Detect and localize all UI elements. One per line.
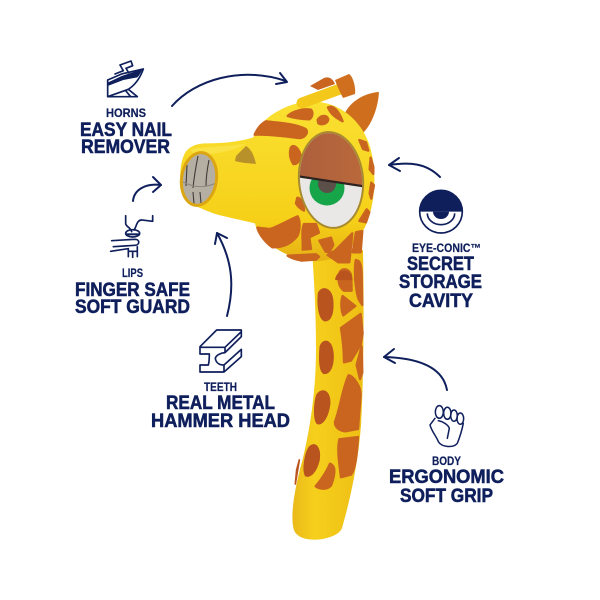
heading: real metal hammer head: HAMMER HEAD bbox=[151, 411, 290, 432]
heading: finger safe soft guard: FINGER SAFE bbox=[75, 280, 190, 301]
callout: teeth bbox=[151, 330, 290, 432]
icon: steel I-beam bbox=[200, 330, 241, 372]
callout: body bbox=[389, 406, 504, 507]
arrow: to teeth bbox=[215, 233, 231, 316]
heading: secret storage cavity: SECRET bbox=[407, 254, 474, 275]
mouth with teeth bbox=[180, 151, 218, 207]
eye bbox=[298, 131, 364, 229]
snout highlight bbox=[190, 143, 247, 155]
label: teeth: TEETH bbox=[204, 382, 237, 394]
head and snout bbox=[180, 102, 374, 261]
callout: lips bbox=[75, 216, 190, 318]
arrow: to body bbox=[384, 349, 447, 390]
heading: easy nail remover: EASY NAIL bbox=[80, 120, 172, 141]
icon: fist bbox=[430, 406, 464, 447]
ear bbox=[345, 92, 379, 133]
head spots bbox=[255, 107, 374, 280]
callout: horns bbox=[80, 61, 172, 158]
nostril bbox=[235, 146, 256, 164]
heading: secret storage cavity: CAVITY bbox=[409, 291, 473, 312]
heading: secret storage cavity: STORAGE bbox=[399, 272, 482, 293]
infographic canvas bbox=[75, 60, 504, 540]
heading: real metal hammer head bbox=[151, 393, 290, 432]
eyelid bbox=[300, 133, 362, 185]
heading: ergonomic soft grip: SOFT GRIP bbox=[400, 486, 493, 507]
heading: ergonomic soft grip: ERGONOMIC bbox=[389, 467, 504, 488]
icon: half-lidded eye bbox=[420, 190, 462, 233]
arrow: to lips bbox=[133, 177, 161, 201]
callout: eye-conic bbox=[399, 190, 482, 312]
arrow: to horns bbox=[172, 73, 287, 106]
heading: easy nail remover: REMOVER bbox=[81, 137, 170, 158]
label: eye-conic: EYE-CONIC™ bbox=[412, 243, 481, 255]
heading: easy nail remover bbox=[80, 120, 172, 158]
heading: secret storage cavity bbox=[399, 254, 482, 312]
horns bbox=[302, 74, 355, 103]
heading: real metal hammer head: REAL METAL bbox=[166, 393, 275, 414]
icon: nail remover horns bbox=[108, 61, 143, 97]
giraffe hammer product bbox=[176, 74, 379, 540]
neck and handle bbox=[292, 250, 364, 540]
heading: ergonomic soft grip bbox=[389, 467, 504, 507]
icon: finger guard bbox=[111, 216, 153, 257]
label: body: BODY bbox=[432, 456, 461, 468]
arrow: to eye bbox=[389, 158, 440, 177]
heading: finger safe soft guard: SOFT GUARD bbox=[75, 297, 190, 318]
label: lips: LIPS bbox=[122, 268, 143, 280]
heading: finger safe soft guard bbox=[75, 280, 190, 318]
iris bbox=[310, 180, 344, 206]
label: horns: HORNS bbox=[106, 108, 146, 120]
